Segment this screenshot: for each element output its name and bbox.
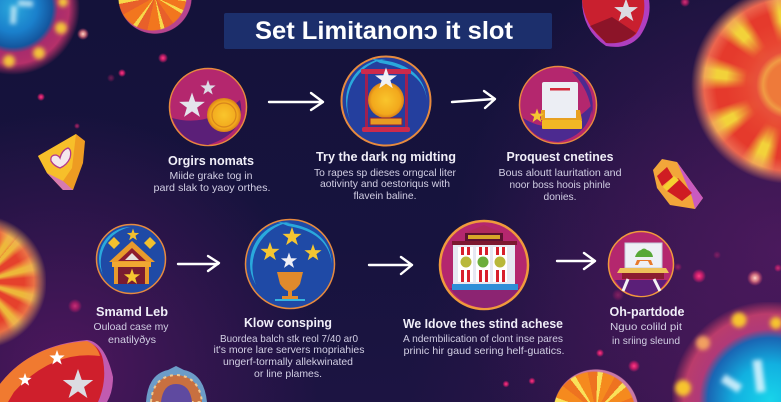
text block: step 7: Oh-partdode [610, 305, 685, 319]
text block: step 6 [403, 317, 564, 357]
text block: step 3: noor boss hoois phinle [510, 179, 611, 191]
decoration: red gem right [653, 159, 703, 209]
text block: step 5: it's more lare servers mopriahies [214, 344, 364, 356]
text block: step 5: ungerf-tormally allekwinated [223, 356, 353, 368]
icon: screen on table [608, 232, 674, 296]
decoration: top-right red chip [582, 0, 650, 47]
text block: step 3: Bous aloutt lauritation and [498, 167, 622, 179]
decoration: top-left wheel bulbs and rays [3, 0, 68, 67]
icon: temple with stars [96, 224, 166, 294]
icon: trophy with stars [246, 220, 334, 308]
arrow 2 [452, 91, 495, 108]
text block: step 2: To rapes sp dieses orngcal liter [314, 167, 456, 179]
arrow 4 [369, 257, 412, 274]
text block: step 6: A ndembilication of clont inse pares [403, 333, 563, 345]
text block: step 3 [498, 150, 622, 203]
text block: step 2 [314, 150, 456, 202]
text block: step 7: in sriing sleund [612, 335, 680, 347]
text block: step 2: flavein baline. [354, 190, 416, 202]
decoration: right large blurred sun wheel [690, 0, 781, 186]
text block: step 1: Orgirs nomats [168, 154, 254, 168]
icon: stars and coin [170, 68, 246, 146]
text block: step 2: aotivinty and oestoriqus with [320, 178, 450, 190]
text block: step 4: Ouload case my [94, 321, 169, 333]
decoration: bottom-left red chip [0, 340, 113, 402]
arrow 3 [178, 256, 219, 271]
arrow 5 [557, 253, 595, 269]
decoration: top orange wheel [118, 0, 192, 35]
text block: step 4 [94, 305, 169, 346]
title: Set Limitanonɔ it slot [255, 17, 514, 45]
arrow 1 [269, 93, 323, 110]
title [224, 13, 552, 49]
text block: step 4: Smamd Leb [96, 305, 168, 319]
decoration: bottom orange wheel [553, 369, 639, 402]
text block: step 4: enatilyðys [108, 334, 156, 346]
text block: step 5: Klow consping [244, 316, 332, 330]
icon: scroll with coin [342, 56, 430, 146]
text block: step 5: Buordea balch stk reol 7/40 ar0 [220, 333, 358, 345]
decoration: top-left blurred wheel [0, 0, 80, 76]
text block: step 7 [610, 305, 685, 347]
decoration: yellow triangular gem left [38, 134, 85, 190]
decoration: left blurred sun wheel [0, 215, 46, 350]
icon: slot machine [440, 221, 528, 309]
text block: step 2: Try the dark ng midting [316, 150, 456, 164]
text block: step 5: or line plames. [254, 368, 322, 380]
icon: white machine on gold base [520, 66, 596, 144]
text block: step 1: pard slak to yaoy orthes. [154, 182, 270, 194]
text block: step 1 [154, 154, 270, 194]
text block: step 7: Nguo colild pit [610, 321, 682, 333]
text block: step 6: prinic hir gaud sering helf-guatics. [404, 345, 564, 357]
decoration: bottom-right wheel bulbs and rays [675, 312, 781, 396]
text block: step 6: We Idove thes stind achese [403, 317, 563, 331]
text block: step 5 [214, 316, 364, 380]
decoration: bottom-right blurred wheel [672, 302, 781, 402]
decoration: bottom medallion [146, 366, 207, 402]
text block: step 1: Miide grake tog in [170, 170, 253, 182]
text block: step 3: Proquest cnetines [506, 150, 614, 164]
text block: step 3: donies. [544, 191, 576, 203]
